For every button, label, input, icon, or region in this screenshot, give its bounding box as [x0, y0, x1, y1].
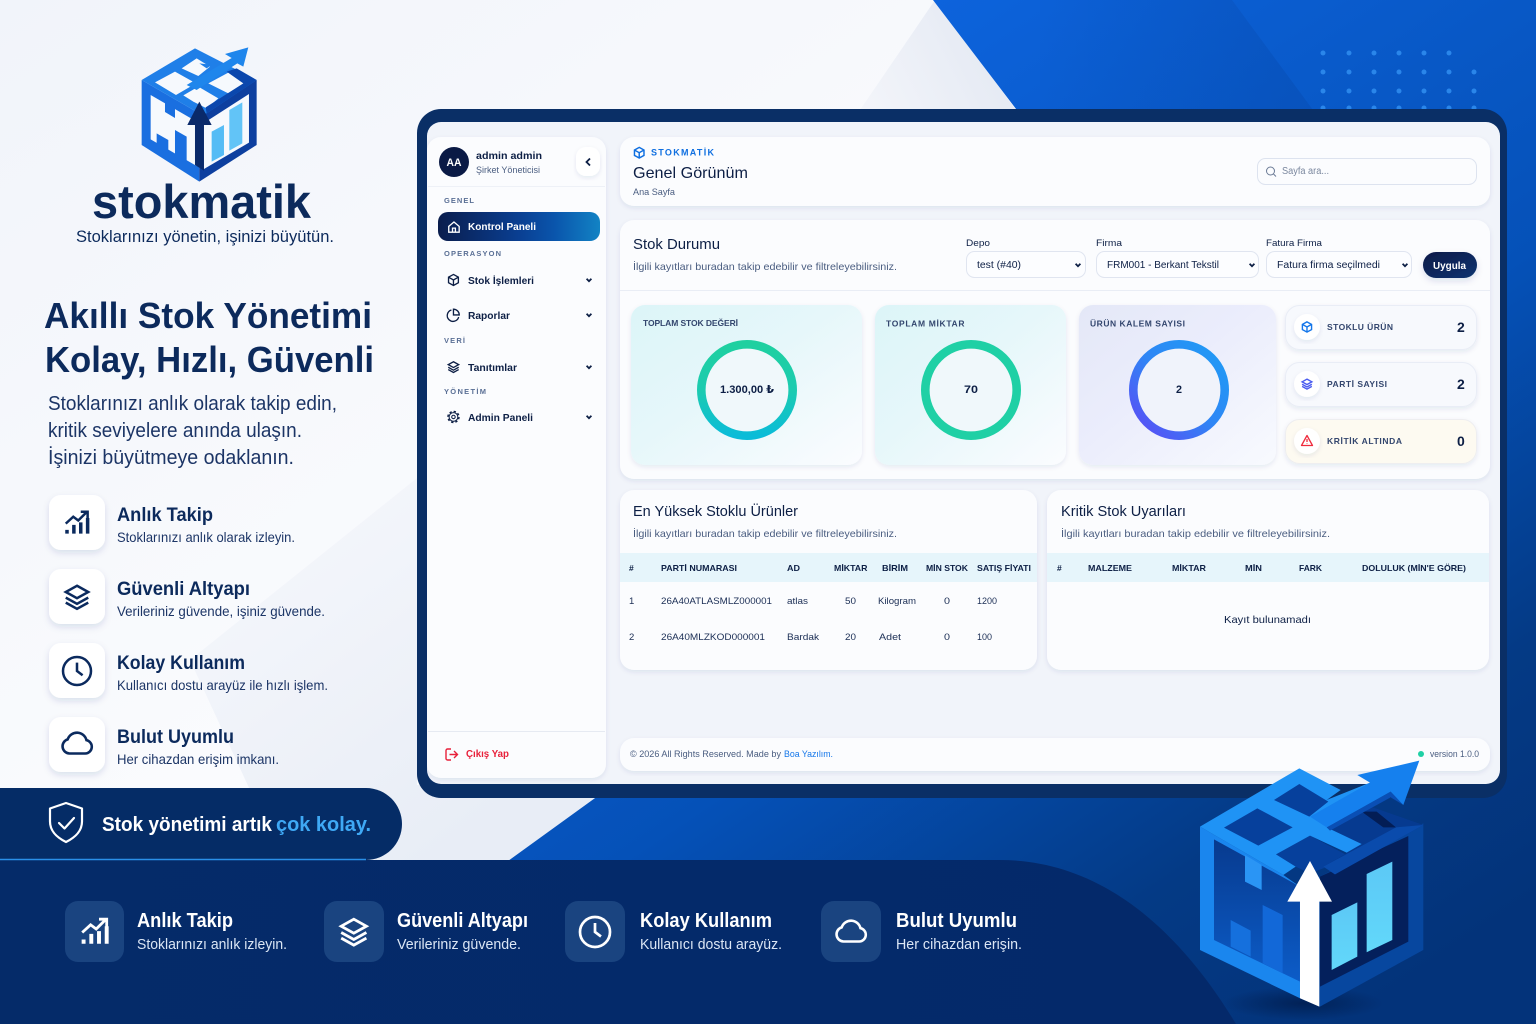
- panel heading: İlgili kayıtları buradan takip edebilir ve filtreleyebilirsiniz.: [633, 260, 897, 273]
- feature: Anlık Takip: [49, 495, 295, 550]
- logo: stokmatik cube icon: [142, 47, 257, 182]
- feature: Kolay Kullanım: Kullanıcı dostu arayüz ile hızlı işlem.: [117, 677, 328, 693]
- bottom feature: Kolay Kullanım: [565, 901, 782, 962]
- table: Kritik Stok Uyarıları: [1047, 490, 1489, 670]
- table: Kritik Stok Uyarıları: İlgili kayıtları buradan takip edebilir ve filtreleyebilirsiniz.: [1061, 527, 1330, 540]
- bottom feature: Anlık Takip: Stoklarınızı anlık izleyin.: [137, 936, 287, 953]
- page header: Ana Sayfa: [633, 187, 676, 198]
- stat card: Ürün Kalem Sayısı: 2: [1176, 384, 1182, 396]
- table row 2: Adet: [879, 632, 901, 643]
- stat card: Ürün Kalem Sayısı: ÜRÜN KALEM SAYISI: [1090, 318, 1185, 328]
- bottom feature: Anlık Takip: [65, 901, 287, 962]
- mini stat: Parti Sayısı: PARTİ SAYISI: [1327, 379, 1387, 389]
- stat card: Toplam Stok Değeri: 1.300,00 ₺: [720, 384, 774, 396]
- alert table header row: DOLULUK (MİN'E GÖRE): [1362, 563, 1466, 573]
- menu item: Stok İşlemleri: [449, 274, 591, 287]
- search box: Sayfa ara...: [1282, 166, 1329, 177]
- feature: Anlık Takip: Anlık Takip: [117, 504, 213, 526]
- mini stat: Kritik Altında: 0: [1457, 433, 1465, 449]
- table header row: MİKTAR: [834, 563, 868, 573]
- bottom feature: Güvenli Altyapı: [324, 901, 528, 962]
- menu item: Tanıtımlar: [448, 362, 591, 374]
- bottom feature: Kolay Kullanım: Kolay Kullanım: [640, 910, 772, 932]
- stat card: Ürün Kalem Sayısı: [1079, 305, 1276, 465]
- dashboard frame: [417, 109, 1507, 798]
- brand name: stokmatik: [92, 175, 312, 228]
- active menu item: [438, 212, 600, 241]
- stat card: Toplam Stok Değeri: TOPLAM STOK DEĞERİ: [643, 317, 738, 328]
- page header: Genel Görünüm: [633, 165, 748, 182]
- footer bar: [620, 738, 1490, 771]
- menu item: Raporlar: Raporlar: [468, 310, 510, 322]
- search box: [1258, 158, 1476, 184]
- table row 1: [629, 596, 997, 607]
- menu item: Stok İşlemleri: Stok İşlemleri: [468, 274, 534, 287]
- filter: Depo: Depo: [966, 238, 990, 249]
- filter: Fatura Firma: Fatura firma seçilmedi: [1277, 260, 1380, 271]
- mini stat: Stoklu Ürün: [1286, 306, 1476, 350]
- table row 2: 0: [944, 632, 950, 643]
- mini stat: Kritik Altında: [1286, 420, 1476, 464]
- apply button: Uygula: [1433, 261, 1466, 272]
- table row 2: [629, 632, 992, 643]
- user profile: admin admin: [476, 150, 542, 162]
- filter: Fatura Firma: Fatura Firma: [1266, 238, 1323, 249]
- feature: Bulut Uyumlu: Bulut Uyumlu: [117, 726, 234, 748]
- bottom feature: Bulut Uyumlu: [821, 901, 1022, 962]
- alert table header row: #: [1057, 563, 1062, 573]
- empty state: Kayıt bulunamadı: [1224, 614, 1311, 626]
- panel: Stok Durumu: [620, 220, 1490, 479]
- bottom feature: Güvenli Altyapı: Güvenli Altyapı: [397, 910, 528, 932]
- user profile: Şirket Yöneticisi: [476, 165, 540, 175]
- table row 1: 50: [845, 596, 856, 607]
- headline: [44, 295, 374, 380]
- mini stat: Kritik Altında: KRİTİK ALTINDA: [1327, 436, 1402, 446]
- table row 1: atlas: [787, 596, 808, 607]
- filter: Firma: [1096, 238, 1258, 278]
- feature: Güvenli Altyapı: [49, 569, 325, 624]
- menu section labels: YÖNETİM: [444, 387, 486, 396]
- alert table header row: [1057, 563, 1466, 573]
- filter: Firma: Firma: [1096, 238, 1123, 249]
- apply button: [1423, 252, 1477, 278]
- panel heading: Stok Durumu: [633, 236, 720, 253]
- table header row: MİN STOK: [926, 563, 969, 573]
- page header: STOKMATİK: [651, 148, 714, 158]
- table row 2: 100: [977, 632, 992, 643]
- table header row: PARTİ NUMARASI: [661, 563, 737, 573]
- table row 2: 26A40MLZKOD000001: [661, 632, 765, 643]
- bottom feature: Kolay Kullanım: Kullanıcı dostu arayüz.: [640, 936, 782, 953]
- table: En Yüksek Stoklu Ürünler: İlgili kayıtları buradan takip edebilir ve filtreleyebilirsiniz.: [633, 527, 897, 540]
- menu section labels: OPERASYON: [444, 249, 501, 258]
- tagline: Stoklarınızı yönetin, işinizi büyütün.: [76, 227, 334, 246]
- footer bar: Boa Yazılım.: [784, 749, 833, 759]
- feature: Kolay Kullanım: Kolay Kullanım: [117, 652, 245, 674]
- table header row: AD: [787, 563, 800, 573]
- menu item: Admin Paneli: Admin Paneli: [468, 412, 533, 424]
- table row 1: 26A40ATLASMLZ000001: [661, 596, 772, 607]
- alert table header row: MİN: [1245, 563, 1262, 573]
- intro paragraph: İşinizi büyütmeye odaklanın.: [48, 446, 294, 469]
- sidebar: [427, 137, 606, 778]
- table row 2: 20: [845, 632, 856, 643]
- bottom feature: Bulut Uyumlu: Her cihazdan erişin.: [896, 936, 1022, 953]
- user profile: AA: [446, 157, 462, 169]
- filter: Firma: FRM001 - Berkant Tekstil: [1107, 260, 1219, 271]
- stat card: Toplam Miktar: 70: [964, 384, 978, 396]
- alert table header row: MİKTAR: [1172, 563, 1206, 573]
- table row 2: 2: [629, 632, 634, 643]
- active menu item: Kontrol Paneli: [468, 221, 536, 233]
- user profile: [439, 147, 600, 177]
- panel heading: [633, 236, 897, 273]
- table row 1: 0: [944, 596, 950, 607]
- mini stat: Parti Sayısı: 2: [1457, 376, 1465, 392]
- table row 1: 1200: [977, 596, 997, 607]
- slogan banner: [0, 788, 402, 860]
- filter: Fatura Firma: [1266, 238, 1412, 278]
- filter: Depo: [966, 238, 1086, 278]
- bottom feature: Güvenli Altyapı: Verileriniz güvende.: [397, 936, 521, 953]
- feature: Kolay Kullanım: [49, 643, 328, 698]
- stat card: Toplam Miktar: TOPLAM MİKTAR: [886, 318, 964, 328]
- slogan banner: Stok yönetimi artık: [102, 813, 273, 836]
- slogan banner: çok kolay.: [276, 813, 371, 836]
- table header row: SATIŞ FİYATI: [977, 563, 1031, 573]
- mini stat: Parti Sayısı: [1286, 362, 1476, 406]
- menu section labels: VERİ: [444, 336, 465, 345]
- footer bar: © 2026 All Rights Reserved. Made by: [630, 749, 781, 759]
- menu section labels: [444, 196, 501, 396]
- table: En Yüksek Stoklu Ürünler: En Yüksek Stoklu Ürünler: [633, 502, 798, 520]
- table header row: #: [629, 563, 634, 573]
- menu item: Raporlar: [447, 309, 591, 322]
- table row 2: Bardak: [787, 632, 819, 643]
- logout: Çıkış Yap: [466, 749, 509, 760]
- feature: Güvenli Altyapı: Verileriniz güvende, işiniz güvende.: [117, 603, 325, 619]
- table header row: BİRİM: [882, 563, 908, 573]
- intro paragraph: [48, 393, 337, 469]
- menu item: Admin Paneli: [448, 411, 591, 424]
- stat card: Toplam Stok Değeri: [631, 305, 862, 465]
- intro paragraph: kritik seviyelere anında ulaşın.: [48, 420, 302, 442]
- bottom feature: Bulut Uyumlu: Bulut Uyumlu: [896, 910, 1017, 932]
- page header: [620, 137, 1490, 206]
- table header row: [629, 563, 1031, 573]
- mini stat: Stoklu Ürün: STOKLU ÜRÜN: [1327, 322, 1393, 332]
- bottom feature: Anlık Takip: Anlık Takip: [137, 910, 233, 932]
- table: Kritik Stok Uyarıları: Kritik Stok Uyarıları: [1061, 504, 1186, 520]
- feature: Güvenli Altyapı: Güvenli Altyapı: [117, 578, 250, 600]
- illustration: large 3D cube with arrows: [1200, 761, 1423, 1020]
- table: En Yüksek Stoklu Ürünler: [620, 490, 1037, 670]
- footer bar: version 1.0.0: [1430, 749, 1479, 759]
- menu section labels: GENEL: [444, 196, 474, 205]
- menu item: Tanıtımlar: Tanıtımlar: [468, 362, 517, 374]
- logout: [446, 749, 509, 760]
- table row 1: Kilogram: [878, 596, 916, 607]
- feature: Bulut Uyumlu: [49, 717, 279, 772]
- alert table header row: FARK: [1299, 563, 1323, 573]
- alert table header row: MALZEME: [1088, 563, 1132, 573]
- feature: Anlık Takip: Stoklarınızı anlık olarak izleyin.: [117, 529, 295, 545]
- filter: Depo: test (#40): [977, 260, 1021, 271]
- mini stat: Stoklu Ürün: 2: [1457, 319, 1465, 335]
- headline: Kolay, Hızlı, Güvenli: [45, 339, 374, 380]
- intro paragraph: Stoklarınızı anlık olarak takip edin,: [48, 393, 337, 415]
- stat card: Toplam Miktar: [875, 305, 1066, 465]
- headline: Akıllı Stok Yönetimi: [44, 295, 372, 336]
- feature: Bulut Uyumlu: Her cihazdan erişim imkanı.: [117, 751, 279, 767]
- table row 1: 1: [629, 596, 634, 607]
